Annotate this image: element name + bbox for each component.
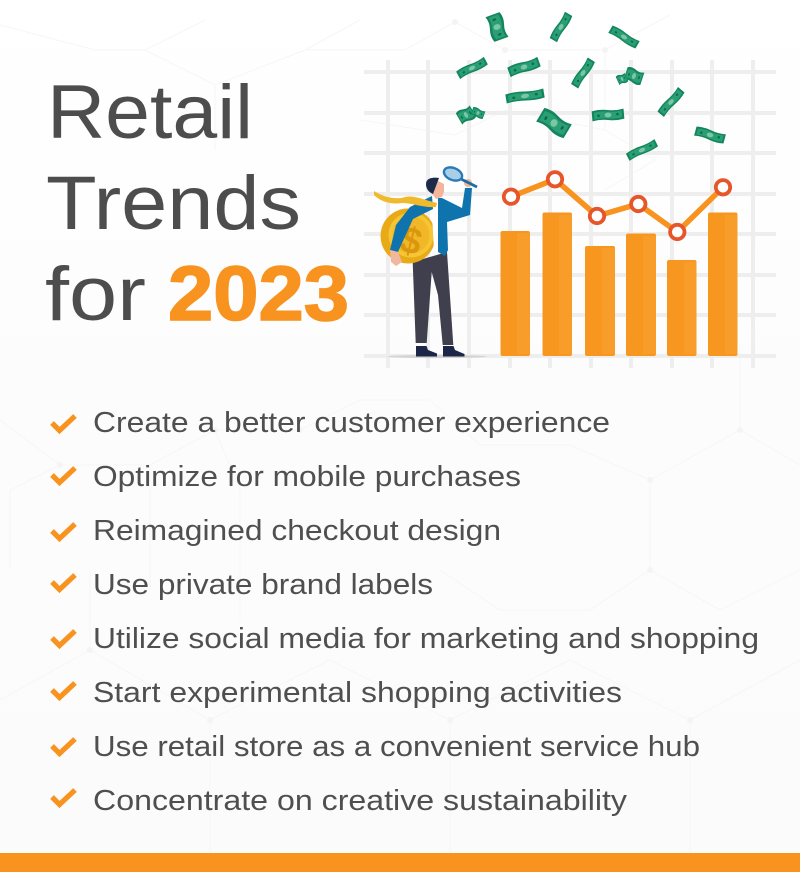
illustration: businessman with coin and magnifier bbox=[374, 165, 487, 358]
item 2: Optimize for mobile purchases bbox=[93, 461, 521, 493]
title bbox=[45, 70, 349, 337]
title line: Trends: Trends bbox=[46, 161, 301, 246]
item 7: Use retail store as a convenient service hub bbox=[93, 731, 700, 763]
item 4: Use private brand labels bbox=[93, 569, 433, 601]
chart grid bbox=[364, 60, 776, 368]
checklist bbox=[52, 407, 759, 817]
falling money bbox=[455, 11, 726, 161]
item 5: Utilize social media for marketing and shopping bbox=[93, 623, 759, 655]
title year: 2023: 2023 bbox=[168, 251, 349, 337]
illustration: businessman with coin and magnifier: $ bbox=[396, 218, 426, 263]
item 8: Concentrate on creative sustainability bbox=[93, 785, 628, 817]
bar chart bbox=[500, 212, 738, 356]
item 3: Reimagined checkout design bbox=[93, 515, 501, 547]
title line: Retail: Retail bbox=[47, 70, 253, 155]
item 6: Start experimental shopping activities bbox=[93, 677, 622, 709]
trend line with markers bbox=[504, 172, 730, 239]
title line: for: for bbox=[45, 252, 146, 337]
item 1: Create a better customer experience bbox=[93, 407, 610, 439]
bottom bar bbox=[0, 853, 800, 872]
